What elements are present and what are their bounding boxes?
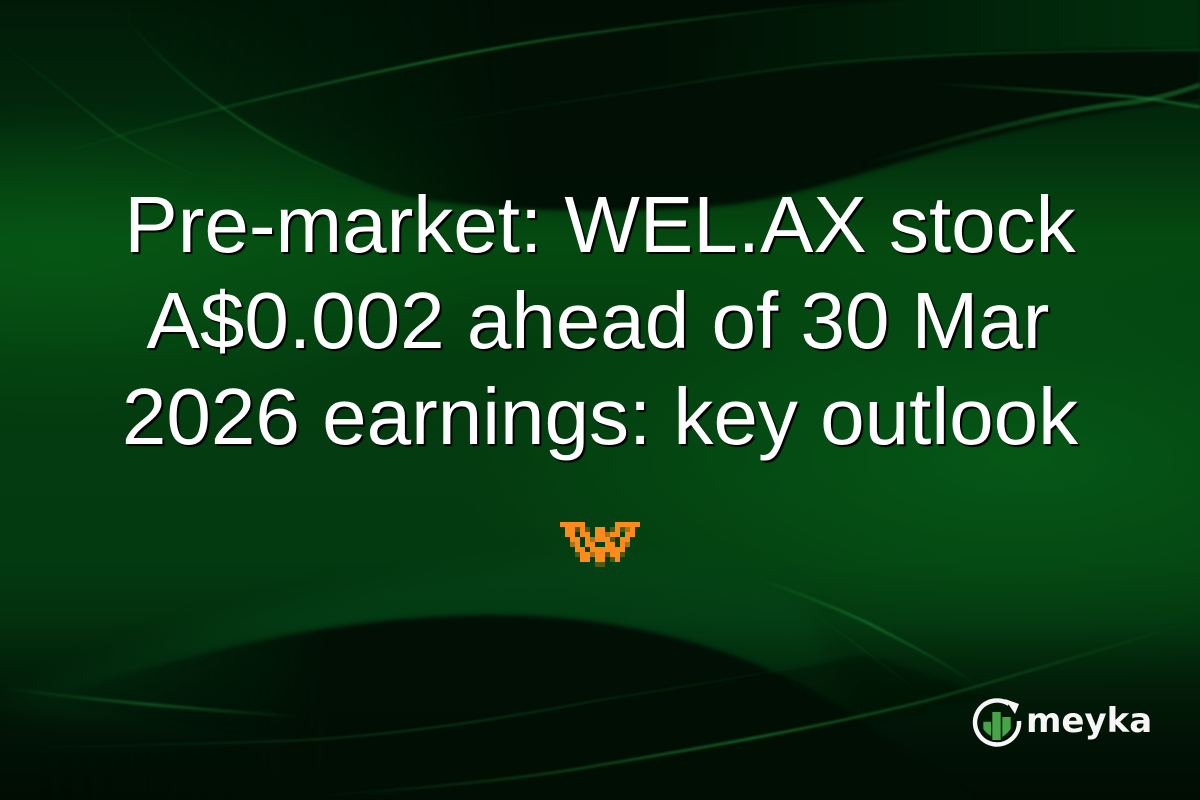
brand name: meyka	[1026, 701, 1152, 741]
title: 2026 earnings: key outlook	[122, 372, 1078, 461]
icon: WEL pixel logo	[560, 522, 640, 567]
icon: meyka ring with bars	[972, 698, 1022, 747]
title	[122, 180, 1080, 463]
title: A$0.002 ahead of 30 Mar	[147, 276, 1049, 365]
brand: meyka logo	[972, 698, 1152, 747]
title: Pre-market: WEL.AX stock	[124, 180, 1076, 269]
